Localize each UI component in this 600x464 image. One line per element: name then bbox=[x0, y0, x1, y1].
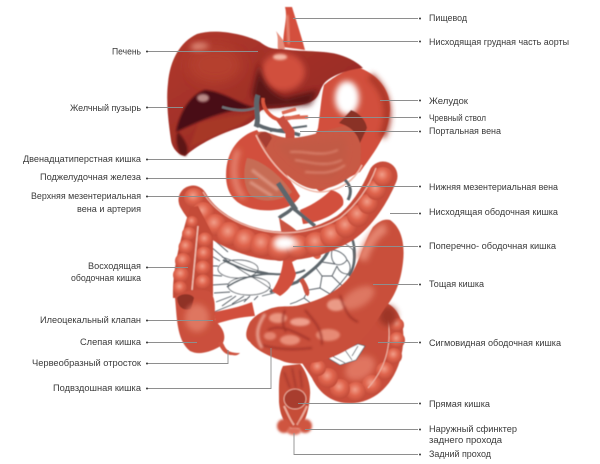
right labels: Нижняя мезентериальная вена bbox=[429, 182, 558, 192]
right labels: Портальная вена bbox=[429, 126, 501, 136]
external anal sphincter bbox=[277, 419, 312, 435]
right labels: Задний проход bbox=[429, 449, 492, 459]
left labels: Илеоцекальный клапан bbox=[40, 315, 141, 325]
left labels: Печень bbox=[112, 46, 141, 56]
left labels: Желчный пузырь bbox=[70, 103, 141, 113]
left labels: Слепая кишка bbox=[80, 337, 141, 347]
portal vein and celiac trunk bbox=[222, 95, 308, 138]
jejunum bbox=[246, 220, 404, 364]
right labels: Прямая кишка bbox=[429, 399, 490, 409]
rectum bbox=[279, 364, 310, 428]
right labels: заднего прохода bbox=[429, 435, 502, 445]
ileum tube bbox=[214, 302, 255, 324]
left labels: Червеобразный отросток bbox=[32, 358, 141, 368]
left labels bbox=[23, 46, 141, 393]
sigmoid colon bbox=[300, 303, 405, 403]
stomach fundus bbox=[300, 68, 390, 192]
cecum bbox=[175, 290, 240, 355]
duodenum bbox=[226, 130, 300, 210]
right cell network bbox=[290, 240, 353, 306]
leader dots bbox=[146, 18, 421, 456]
left labels: Двенадцатиперстная кишка bbox=[23, 154, 141, 164]
right labels: Наружный сфинктер bbox=[429, 424, 517, 434]
organ illustration bbox=[167, 7, 405, 435]
right labels: Нисходящая грудная часть аорты bbox=[429, 37, 569, 47]
superior mesenteric vessels bbox=[278, 180, 350, 236]
left labels: Верхняя мезентериальная bbox=[31, 191, 141, 201]
transverse colon bbox=[184, 167, 393, 261]
left labels: Поджелудочная железа bbox=[40, 172, 141, 182]
right labels: Чревный ствол bbox=[429, 113, 486, 123]
ascending colon bbox=[173, 206, 213, 298]
pancreas bbox=[244, 158, 292, 201]
left labels: ободочная кишка bbox=[71, 273, 141, 283]
right labels: Пищевод bbox=[429, 13, 468, 23]
mesentery network bbox=[210, 238, 355, 312]
right labels: Нисходящая ободочная кишка bbox=[429, 207, 558, 217]
right labels: Желудок bbox=[429, 96, 468, 106]
right labels: Поперечно- ободочная кишка bbox=[429, 241, 556, 251]
left labels: Подвздошная кишка bbox=[53, 383, 141, 393]
right labels: Тощая кишка bbox=[429, 279, 484, 289]
leader lines bbox=[148, 18, 418, 454]
left labels: Восходящая bbox=[88, 261, 141, 271]
right labels bbox=[429, 13, 569, 459]
esophagus and aorta bbox=[276, 7, 305, 50]
left labels: вена и артерия bbox=[77, 204, 141, 214]
stomach open body bbox=[256, 110, 367, 192]
right labels: Сигмовидная ободочная кишка bbox=[429, 338, 561, 348]
liver bbox=[167, 32, 363, 156]
